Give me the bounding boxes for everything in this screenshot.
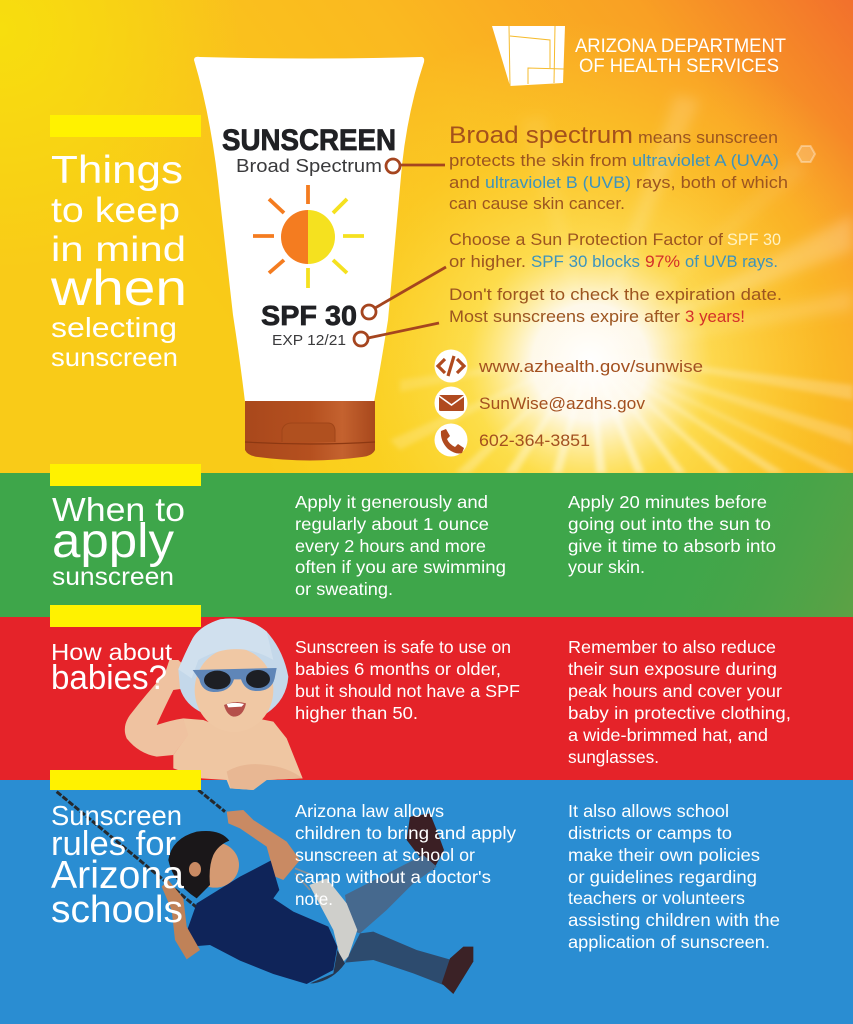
- product name: SUNSCREEN: [222, 124, 396, 157]
- text: expiration: 3 years!: [685, 307, 745, 326]
- yellow accent bar: [50, 770, 201, 790]
- text: when to apply, column 2: going out into the sun to: [568, 514, 771, 534]
- text: when to apply, column 2: Apply 20 minutes before: [568, 492, 767, 512]
- yellow accent bar: [50, 464, 201, 486]
- heading: things to keep in mind: selecting: [51, 312, 177, 343]
- heading: when to apply: apply: [52, 515, 174, 568]
- yellow accent bar: [50, 605, 201, 627]
- expiry label: EXP 12/21: [272, 332, 346, 349]
- text: babies, column 2: peak hours and cover your: [568, 681, 782, 701]
- text: SPF guidance: SPF 30: [727, 230, 781, 249]
- heading: sunscreen rules for Arizona schools: Arizona: [51, 854, 184, 897]
- text: babies, column 2: a wide-brimmed hat, and: [568, 725, 768, 745]
- SPF label: SPF 30: [261, 300, 357, 331]
- text: SPF guidance: or higher.: [449, 252, 526, 271]
- text: SPF guidance: SPF 30 blocks: [531, 252, 640, 271]
- tube body: [194, 57, 424, 402]
- contact: website: www.azhealth.gov/sunwise: [478, 357, 703, 376]
- text: broad spectrum: can cause skin cancer.: [449, 194, 625, 213]
- text: broad spectrum: Broad spectrum: [449, 122, 633, 149]
- logo mark: [492, 26, 565, 86]
- text: SPF guidance: 97%: [645, 252, 680, 271]
- text: schools, column 2: It also allows school: [568, 801, 729, 821]
- swing seat: [309, 878, 357, 963]
- heading: how about babies: How about: [51, 639, 173, 665]
- text: schools, column 1: sunscreen at school or: [295, 845, 475, 865]
- text: schools, column 2: or guidelines regarding: [568, 867, 757, 887]
- sunglasses: [193, 668, 277, 692]
- photo: baby with hat and sunglasses: [125, 618, 303, 790]
- raised leg and shoe: [345, 813, 444, 933]
- lower leg and shoe: [345, 932, 473, 994]
- open mouth: [224, 702, 246, 717]
- heading: sunscreen rules for Arizona schools: rules for: [51, 825, 176, 863]
- text: when to apply, column 1: [295, 492, 506, 599]
- panel: blue band: [0, 780, 853, 1024]
- decorative hexagon flare: [797, 146, 815, 162]
- text: when to apply, column 2: [568, 492, 776, 577]
- icon: half orange half yellow sun: [253, 185, 364, 288]
- baby face: [195, 648, 273, 732]
- heading: things to keep in mind: sunscreen: [51, 342, 178, 372]
- text: SPF guidance: [449, 230, 781, 271]
- contact: email: [434, 386, 646, 420]
- baby raised arm: [125, 660, 193, 757]
- heading: how about babies: babies?: [51, 659, 167, 697]
- heading: how about babies: [51, 639, 173, 697]
- heading: things to keep in mind: Things: [51, 149, 183, 192]
- heading: when to apply: sunscreen: [52, 563, 174, 591]
- tube cap: [245, 401, 375, 460]
- text: broad spectrum: means sunscreen: [638, 128, 778, 147]
- text: SPF guidance: Choose a Sun Protection Factor of: [449, 230, 723, 249]
- heading: sunscreen rules for Arizona schools: Sunscreen: [51, 800, 182, 831]
- text: babies, column 2: sunglasses.: [568, 747, 659, 767]
- text: broad spectrum: rays, both of which: [636, 173, 788, 192]
- heading: things to keep in mind: in mind: [51, 230, 186, 269]
- boy hair: [168, 831, 229, 898]
- text: babies, column 2: Remember to also reduce: [568, 637, 776, 657]
- text: when to apply, column 1: every 2 hours and more: [295, 536, 486, 556]
- panel: sunburst header background: [0, 0, 853, 473]
- callout connectors: [354, 159, 446, 346]
- text: babies, column 2: their sun exposure during: [568, 659, 777, 679]
- other arm: [162, 880, 200, 959]
- logo text: OF HEALTH SERVICES: [579, 56, 779, 77]
- text: schools, column 2: [568, 801, 780, 952]
- text: schools, column 1: children to bring and apply: [295, 823, 516, 843]
- text: when to apply, column 1: regularly about 1 ounce: [295, 514, 489, 534]
- heading: things to keep in mind: [50, 149, 187, 372]
- heading: sunscreen rules for Arizona schools: schools: [51, 889, 183, 931]
- contact: email: SunWise@azdhs.gov: [479, 394, 646, 413]
- text: broad spectrum: and: [449, 173, 480, 192]
- text: babies, column 1: higher than 50.: [295, 703, 418, 723]
- text: expiration: [449, 285, 782, 326]
- text: schools, column 1: note.: [295, 889, 333, 909]
- text: broad spectrum: ultraviolet B (UVB): [485, 173, 631, 192]
- heading: things to keep in mind: when: [50, 260, 187, 316]
- text: broad spectrum: [449, 122, 788, 213]
- heading: when to apply: [52, 491, 185, 591]
- text: schools, column 1: camp without a doctor's: [295, 867, 491, 887]
- text: when to apply, column 2: your skin.: [568, 557, 645, 577]
- text: babies, column 2: [568, 637, 791, 767]
- boy face: [191, 842, 239, 888]
- arm raised to chain: [227, 810, 300, 880]
- text: schools, column 2: teachers or volunteers: [568, 888, 745, 908]
- heading: when to apply: When to: [52, 491, 185, 528]
- text: schools, column 2: make their own policies: [568, 845, 760, 865]
- text: schools, column 2: districts or camps to: [568, 823, 732, 843]
- text: babies, column 1: but it should not have a SPF: [295, 681, 520, 701]
- text: schools, column 1: Arizona law allows: [295, 801, 444, 821]
- shirt: [187, 861, 337, 984]
- text: schools, column 2: application of sunscreen.: [568, 932, 770, 952]
- text: broad spectrum: ultraviolet A (UVA): [632, 151, 779, 170]
- heading: sunscreen rules for Arizona schools: [51, 800, 184, 931]
- text: broad spectrum: protects the skin from: [449, 151, 627, 170]
- contact: phone: [434, 424, 590, 456]
- panel: green band: [0, 473, 853, 617]
- text: schools, column 2: assisting children with the: [568, 910, 780, 930]
- text: expiration: Don't forget to check the expiration date.: [449, 285, 782, 304]
- sun hat crown: [178, 618, 273, 678]
- baby torso: [173, 718, 303, 790]
- text: SPF guidance: of UVB rays.: [685, 252, 778, 271]
- panel: red band: [0, 617, 853, 780]
- sun hat brim: [178, 618, 288, 713]
- boy ear: [189, 862, 201, 877]
- text: when to apply, column 1: often if you are swimming: [295, 557, 506, 577]
- yellow accent bar: [50, 115, 201, 137]
- text: when to apply, column 1: Apply it generously and: [295, 492, 488, 512]
- sunscreen tube: [194, 57, 424, 461]
- swing chains: [57, 790, 225, 907]
- text: expiration: Most sunscreens expire after: [449, 307, 680, 326]
- broad spectrum label: Broad Spectrum: [236, 155, 382, 176]
- text: when to apply, column 1: or sweating.: [295, 579, 393, 599]
- text: babies, column 2: baby in protective clothing,: [568, 703, 791, 723]
- heading: things to keep in mind: to keep: [51, 191, 180, 230]
- text: babies, column 1: babies 6 months or older,: [295, 659, 501, 679]
- text: schools, column 1: [295, 801, 516, 909]
- text: when to apply, column 2: give it time to absorb into: [568, 536, 776, 556]
- logo text: [575, 36, 786, 77]
- text: babies, column 1: [295, 637, 520, 723]
- logo text: ARIZONA DEPARTMENT: [575, 36, 786, 57]
- text: babies, column 1: Sunscreen is safe to use on: [295, 637, 511, 657]
- photo: boy on a swing: [57, 790, 473, 994]
- contact: phone: 602-364-3851: [479, 431, 590, 450]
- contact: website: [434, 350, 703, 382]
